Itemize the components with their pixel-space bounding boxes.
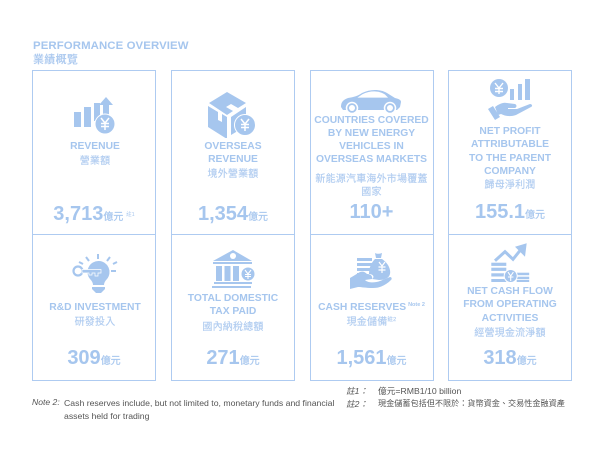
icon: key and lightbulb	[72, 254, 118, 293]
icon: cash flow arrow and coins	[491, 243, 530, 282]
footnote: chinese notes: 註1：	[346, 386, 368, 396]
tax value: 271億元	[206, 347, 260, 369]
net profit label: ATTRIBUTABLE	[471, 139, 549, 150]
footnote: chinese notes	[346, 386, 565, 408]
icon: money bag in hand	[350, 253, 392, 289]
footnote: english note 2	[32, 397, 334, 421]
footnote: chinese notes: 億元=RMB1/10 billion	[378, 386, 461, 396]
footnote: english note 2: Note 2:	[32, 397, 60, 407]
countries covered label: OVERSEAS MARKETS	[316, 154, 427, 165]
net cash flow label: FROM OPERATING	[463, 299, 557, 310]
footnote: english note 2: assets held for trading	[64, 411, 149, 421]
panel: cash reserves	[310, 234, 434, 381]
revenue label	[70, 140, 120, 167]
panel: total domestic tax paid	[171, 234, 295, 381]
tax label	[188, 293, 278, 333]
countries covered label: VEHICLES IN	[339, 141, 404, 152]
overseas revenue label: OVERSEAS	[204, 140, 262, 152]
overseas revenue label: REVENUE	[208, 154, 258, 165]
countries covered label: 國家	[361, 187, 382, 198]
revenue label: 營業額	[80, 156, 110, 167]
R&D value: 309億元	[67, 347, 121, 369]
panel: countries covered	[310, 70, 434, 235]
panel: net cash flow	[448, 234, 572, 381]
tax label: TOTAL DOMESTIC	[188, 293, 278, 304]
net profit label: COMPANY	[484, 166, 536, 177]
net cash flow label: ACTIVITIES	[482, 313, 538, 324]
net cash flow label: NET CASH FLOW	[467, 286, 553, 297]
net profit label: TO THE PARENT	[469, 153, 551, 164]
R&D label: 研發投入	[75, 317, 115, 328]
cash reserves label: CASH RESERVES Note 2	[318, 302, 425, 313]
net cash flow label: 經營現金流淨額	[474, 328, 546, 339]
revenue value: 3,713億元 註1	[53, 203, 135, 225]
countries covered value: 110+	[350, 200, 393, 222]
countries covered label: COUNTRIES COVERED	[314, 114, 429, 126]
countries covered label: 新能源汽車海外市場覆蓋	[315, 174, 428, 185]
cash reserves label: 現金儲備註2	[347, 317, 396, 328]
panel: R&D investment	[32, 234, 156, 381]
net profit label: NET PROFIT	[479, 126, 541, 137]
footnote: chinese notes: 現金儲蓄包括但不限於：貨幣資金、交易性金融資產	[378, 398, 565, 408]
footnote: chinese notes: 註2：	[346, 398, 368, 408]
revenue label: REVENUE	[70, 140, 120, 152]
net profit label: 歸母淨利潤	[484, 180, 536, 191]
title: 業績概覽	[33, 54, 78, 66]
net profit label	[469, 126, 551, 191]
icon: bank building and yen	[212, 250, 254, 288]
footnote: english note 2: Cash reserves include, but not limited to, monetary funds and financial	[64, 398, 334, 408]
overseas revenue label	[204, 140, 262, 180]
R&D label	[49, 302, 141, 328]
panel: revenue	[32, 70, 156, 235]
countries covered label	[314, 114, 429, 198]
title: PERFORMANCE OVERVIEW	[33, 40, 189, 52]
overseas revenue label: 境外營業額	[207, 169, 258, 180]
icon: car	[341, 90, 401, 113]
net cash flow value: 318億元	[483, 347, 537, 369]
cash reserves value: 1,561億元	[336, 347, 407, 369]
countries covered label: BY NEW ENERGY	[328, 128, 415, 139]
title	[33, 40, 189, 66]
icon: revenue bars and yen	[74, 97, 114, 134]
icon: box and yen	[208, 92, 255, 138]
tax label: 國內納稅總額	[202, 322, 264, 333]
cash reserves label	[318, 302, 425, 328]
net cash flow label	[463, 286, 557, 339]
net profit value: 155.1億元	[475, 200, 545, 222]
icon: profit hand	[488, 79, 532, 120]
panel: net profit	[448, 70, 572, 235]
overseas revenue value: 1,354億元	[198, 203, 268, 225]
tax label: TAX PAID	[210, 306, 256, 317]
R&D label: R&D INVESTMENT	[49, 302, 141, 313]
panel: overseas revenue	[171, 70, 295, 235]
